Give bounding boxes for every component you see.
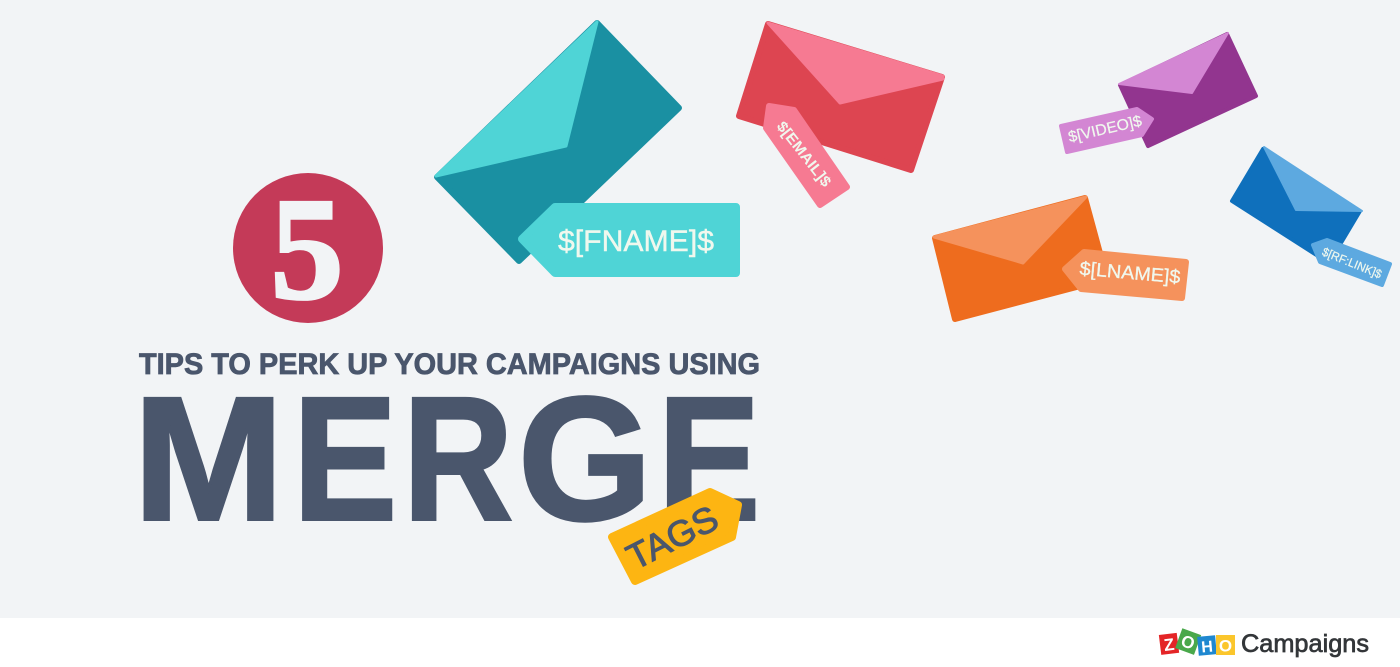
logo block: H: [1197, 635, 1217, 657]
title: MERGE: G: [518, 362, 652, 558]
title: MERGE: R: [403, 362, 513, 558]
envelope: purple with VIDEO tag: [1061, 33, 1256, 152]
icon: number 5 badge: [233, 168, 383, 330]
tag: VIDEO: [1061, 109, 1152, 152]
logo block: Z: Z: [1163, 635, 1175, 655]
title: MERGE: [133, 362, 760, 558]
tag: LNAME: $[LNAME]$: [1079, 259, 1182, 288]
tag: EMAIL: [766, 106, 847, 205]
tag: FNAME: $[FNAME]$: [558, 225, 714, 258]
envelope: teal with FNAME tag: [436, 22, 736, 273]
logo wordmark: Campaigns: [1241, 630, 1369, 658]
tag: RF:LINK: $[RF:LINK]$: [1320, 245, 1384, 281]
tag: VIDEO: $[VIDEO]$: [1067, 113, 1144, 146]
icon: number 5 badge: 5: [270, 168, 344, 330]
logo: Zoho Campaigns: [1159, 628, 1369, 658]
tag: FNAME: [522, 207, 736, 273]
logo block: O yellow: [1216, 635, 1235, 656]
logo block: Z: [1159, 633, 1179, 655]
title: MERGE: E: [293, 362, 397, 558]
tag: EMAIL: $[EMAIL]$: [773, 118, 835, 191]
logo block: O green: [1175, 628, 1201, 655]
subtitle: TIPS TO PERK UP YOUR CAMPAIGNS USING: [139, 348, 760, 381]
envelope: blue with RF:LINK tag: [1232, 147, 1390, 285]
title: MERGE: M: [133, 362, 284, 558]
logo block: O green: O: [1178, 631, 1197, 654]
envelope: orange with LNAME tag: [934, 197, 1186, 319]
tag: LNAME: [1065, 252, 1186, 298]
tag: TAGS: TAGS: [620, 497, 725, 578]
logo block: H: H: [1201, 639, 1214, 656]
title: MERGE: E: [658, 362, 760, 558]
logo block: O yellow: O: [1219, 636, 1232, 656]
envelope: red with EMAIL tag: [739, 23, 943, 205]
